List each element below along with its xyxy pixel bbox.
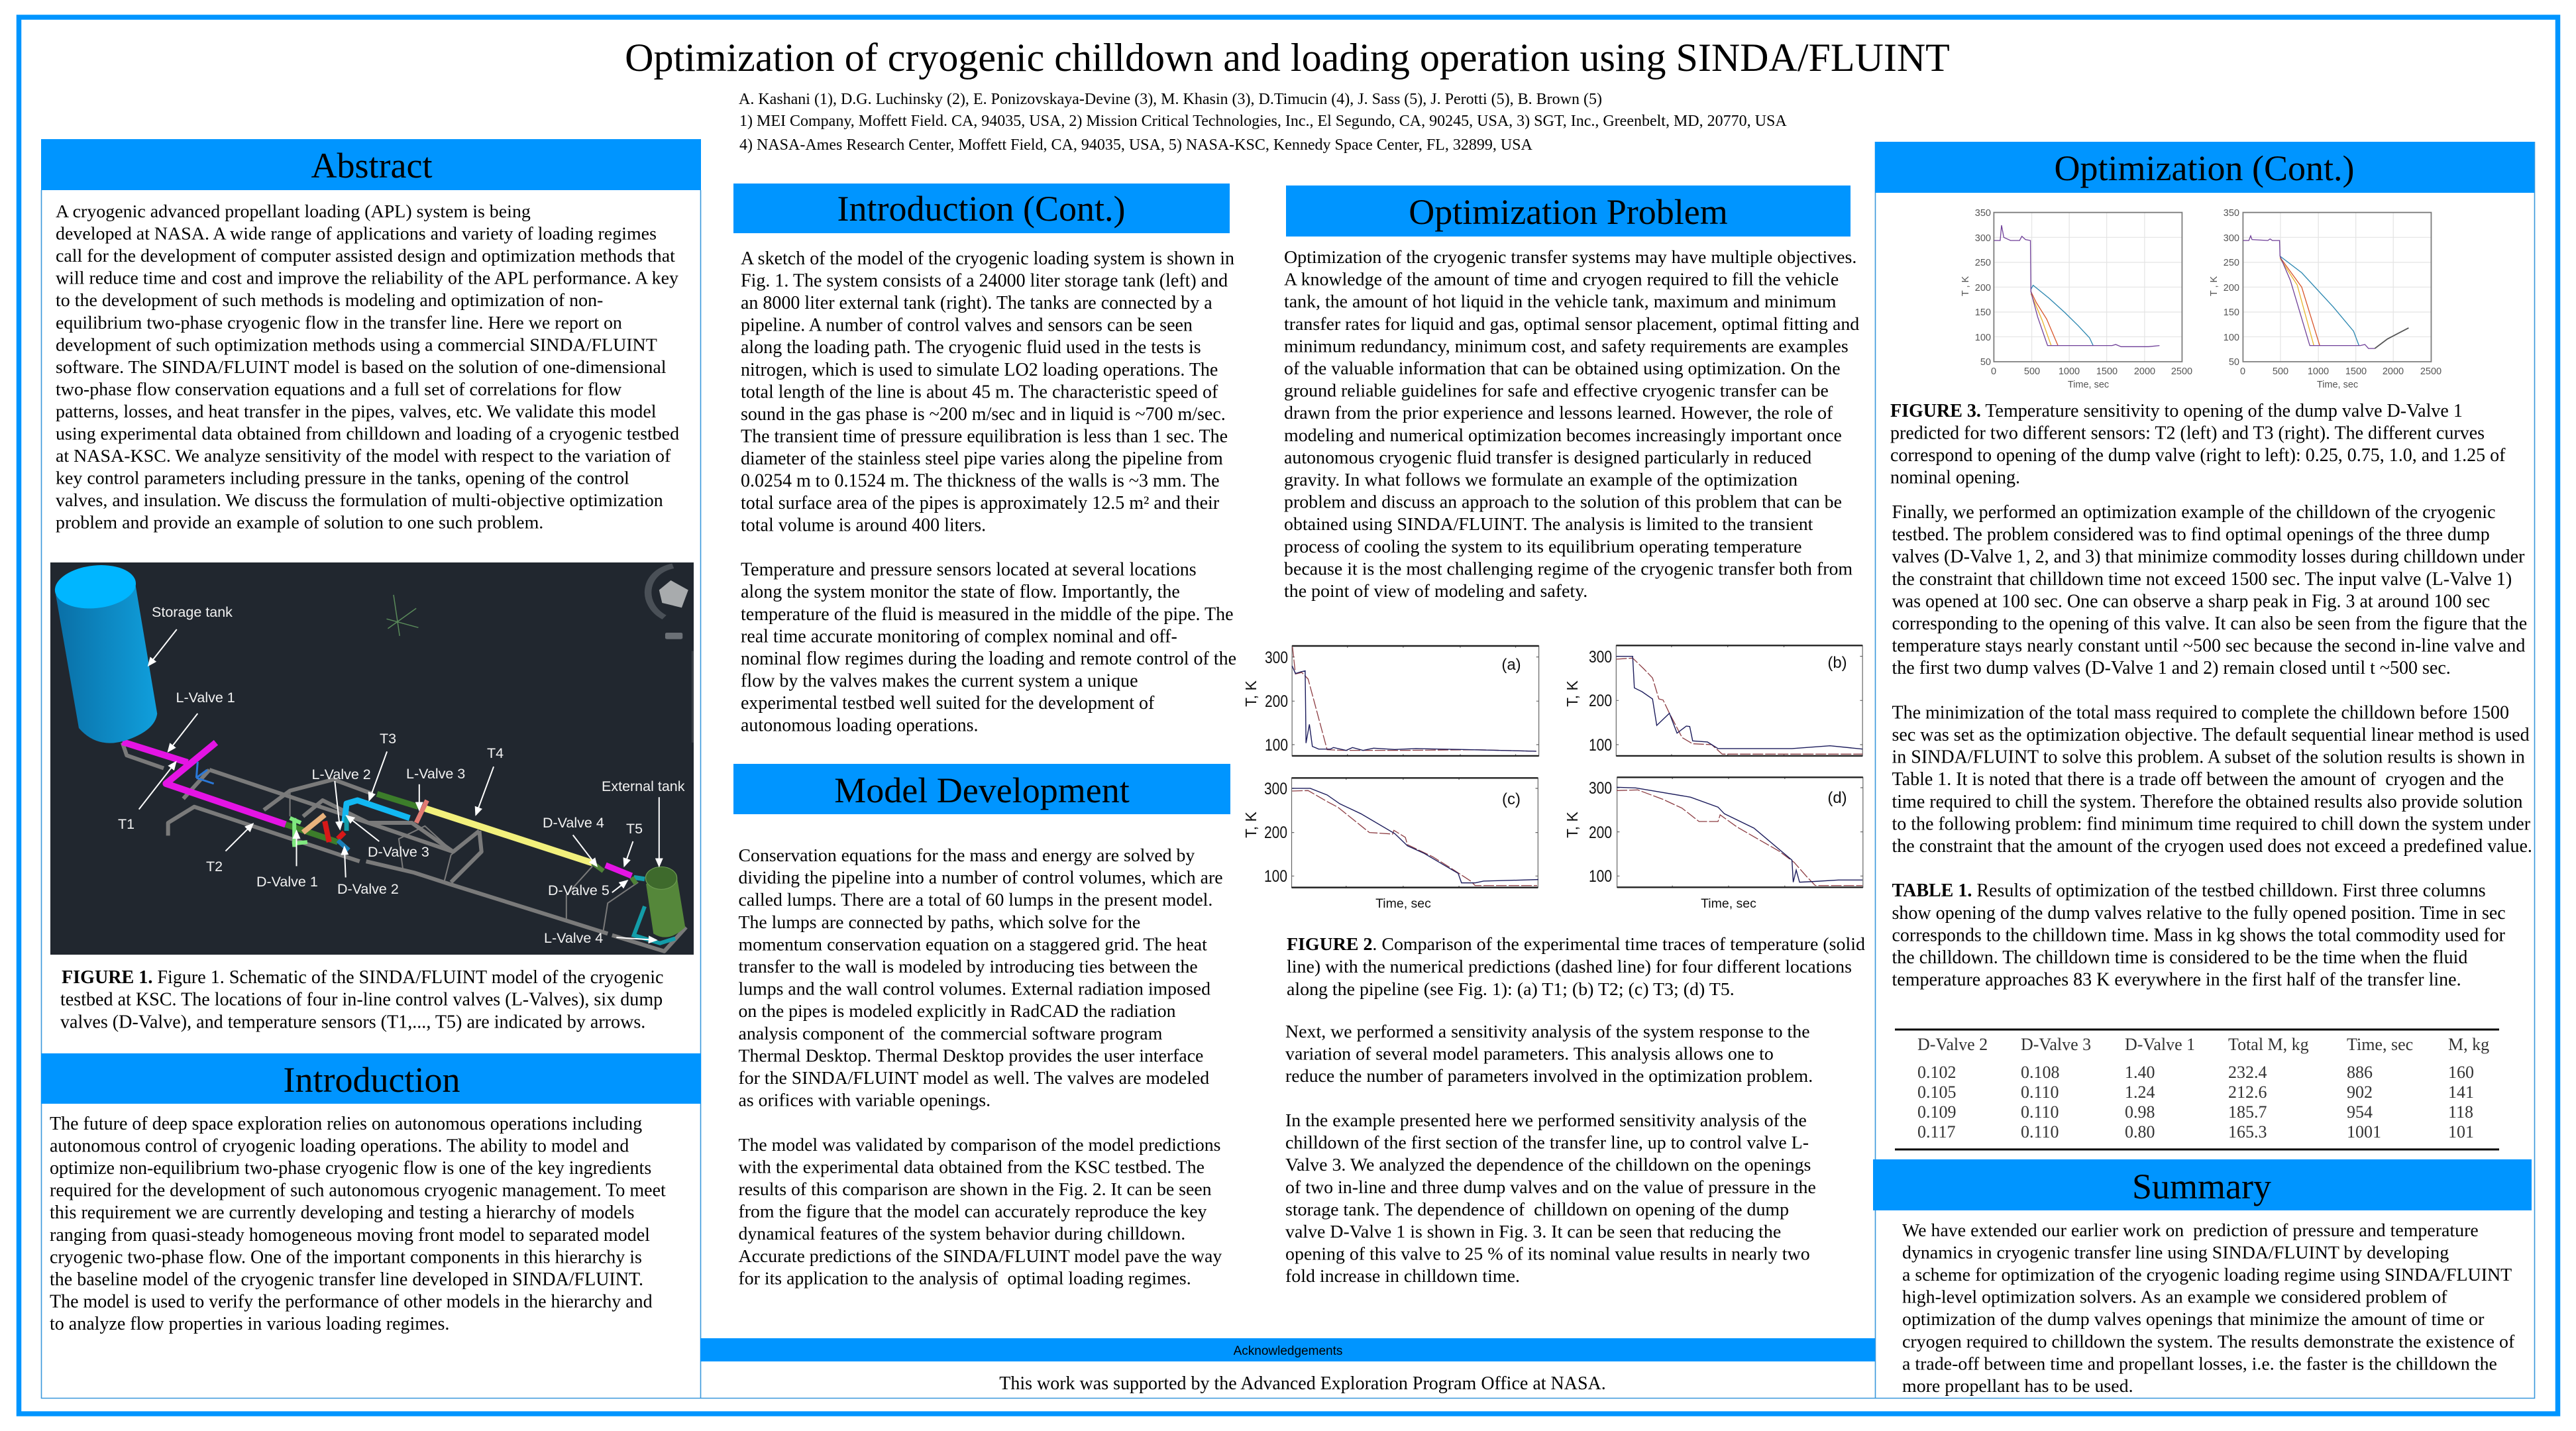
table 1: optimization results: D-Valve 3 [2021, 1035, 2091, 1054]
text: optimization results and table caption: temperature stays nearly constant until ~500 sec because the second in-line valve and [1892, 636, 2525, 657]
text: summary: optimization of the dump valves openings that minimize the amount of time or [1902, 1309, 2485, 1330]
text: optimization problem: problem and discuss an approach to the solution of this problem that can be [1284, 492, 1842, 513]
figure 1 labels: D-Valve 4 [543, 815, 604, 831]
plot axis labels: 250 [2224, 258, 2239, 268]
plot axis labels: 0 [1991, 366, 1996, 377]
text: introduction: ranging from quasi-steady homogeneous moving front model to separated model [50, 1225, 650, 1246]
plot axis labels: 300 [1975, 233, 1991, 244]
text: optimization results and table caption: corresponding to the opening of this valve. It can also be seen from the figure that the [1892, 613, 2527, 634]
panel: abstract [41, 139, 701, 533]
text: optimization problem: tank, the amount of hot liquid in the vehicle tank, maximum and minimum [1284, 292, 1837, 312]
plot axis labels: Time, sec [1375, 896, 1431, 911]
panel: optimization continued [1875, 142, 2534, 1150]
table 1: optimization results: 0.110 [2021, 1122, 2059, 1141]
text: introduction cont: 0.0254 m to 0.1524 m. The thickness of the walls is ~3 mm. The [741, 470, 1220, 492]
text: introduction cont: along the loading path. The cryogenic fluid used in the tests is [741, 337, 1201, 358]
plot axis labels: 300 [1264, 780, 1287, 798]
text: optimization problem: because it is the most challenging regime of the cryogenic transfer both from [1284, 558, 1852, 579]
text: model development: from the figure that the model can accurately reproduce the key [738, 1202, 1207, 1222]
text: abstract: equilibrium two-phase cryogenic flow in the transfer line. Here we report on [56, 313, 622, 333]
text: optimization results and table caption: time required to chill the system. Therefore the obtained results also provide solution [1892, 792, 2523, 812]
text: optimization results and table caption: to the following problem: find minimum time required to chill down the system under [1892, 814, 2531, 834]
heading: optimization problem [1286, 186, 1851, 237]
text: introduction cont: total surface area of the pipes is approximately 12.5 m² and their [741, 493, 1220, 513]
text: optimization problem: modeling and numerical optimization becomes increasingly important once [1284, 425, 1842, 446]
heading: summary [1873, 1159, 2532, 1210]
panel: summary [1873, 1159, 2532, 1397]
plot axis labels: 200 [1975, 283, 1991, 293]
heading: introduction cont: Introduction (Cont.) [837, 189, 1125, 229]
plot axis labels: T , K [2209, 276, 2220, 296]
heading: summary: Summary [2132, 1167, 2271, 1206]
pipeline drawing [123, 595, 692, 951]
plot axis labels: Time, sec [1701, 896, 1756, 911]
text: optimization problem: ground reliable guidelines for safe and effective cryogenic transfer can be [1284, 381, 1829, 401]
plot axis labels: 150 [1975, 307, 1991, 318]
plot axis labels [1960, 208, 2442, 390]
figure 1 labels: T2 [206, 859, 223, 874]
figure 1 caption: FIGURE 1. Figure 1. Schematic of the SINDA/FLUINT model of the cryogenic [62, 967, 663, 988]
table 1: optimization results: 0.105 [1917, 1083, 1956, 1102]
plot axis labels: Time, sec [2068, 380, 2109, 390]
plot axis labels: 100 [1589, 736, 1612, 755]
plot axis labels: 2000 [2134, 366, 2155, 377]
figure 2: temperature traces [1242, 645, 1863, 911]
figure 3: temperature sensitivity plots [1960, 208, 2442, 390]
icon: storage tank [50, 560, 157, 743]
figure 1 labels: L-Valve 1 [176, 690, 235, 706]
figure 1 labels: L-Valve 3 [406, 766, 465, 782]
figure 2 caption and following text: storage tank. The dependence of chilldown on opening of the dump [1285, 1199, 1789, 1220]
plot axis labels: T, K [1564, 812, 1581, 838]
text: introduction: optimize non-equilibrium two-phase cryogenic flow is one of the key ingredients [50, 1158, 651, 1179]
figure 1 labels: T1 [118, 816, 134, 832]
text: abstract: call for the development of computer assisted design and optimization methods that [56, 246, 675, 266]
heading: model development [733, 764, 1230, 814]
text: optimization results and table caption: the first two dump valves (D-Valve 1 and 2) remain closed until t ~500 sec. [1892, 658, 2451, 678]
plot axis labels: 200 [1264, 823, 1287, 842]
heading: abstract [41, 139, 701, 190]
title: Optimization of cryogenic chilldown and loading operation using SINDA/FLUINT [625, 36, 1950, 80]
text: summary: dynamics in cryogenic transfer line using SINDA/FLUINT by developing [1902, 1243, 2449, 1263]
text: introduction cont: nitrogen, which is used to simulate LO2 loading operations. The [741, 360, 1218, 380]
text: abstract: two-phase flow conservation equations and a full set of correlations for flow [56, 379, 622, 399]
figure 1 labels: D-Valve 2 [337, 881, 399, 897]
figure 2 caption and following text: Next, we performed a sensitivity analysis of the system response to the [1285, 1022, 1810, 1042]
figure 1 labels: T4 [487, 745, 504, 761]
plot axis labels: 100 [1975, 333, 1991, 343]
text: introduction cont: The transient time of pressure equilibration is less than 1 sec. The [741, 426, 1228, 447]
text: introduction cont: an 8000 liter external tank (right). The tanks are connected by a [741, 293, 1212, 313]
table 1: optimization results: 886 [2347, 1063, 2373, 1082]
figure 3 caption: predicted for two different sensors: T2 (left) and T3 (right). The different curves [1890, 423, 2485, 444]
text: summary: more propellant has to be used. [1902, 1376, 2133, 1397]
plot axis labels: 100 [2224, 333, 2239, 343]
table 1: optimization results: 0.98 [2125, 1102, 2155, 1122]
plot axis labels: T, K [1242, 812, 1260, 838]
plot axis labels: T , K [1960, 276, 1971, 296]
text: optimization results and table caption: The minimization of the total mass required to complete the chilldown before 1500 [1892, 702, 2509, 723]
text: summary: a trade-off between time and propellant losses, i.e. the faster is the chilldown the [1902, 1353, 2497, 1374]
figure 1: schematic of the testbed [50, 560, 694, 955]
text: optimization results and table caption: show opening of the dump valves relative to the fully opened position. Time in sec [1892, 903, 2506, 924]
text: introduction: autonomous control of cryogenic loading operations. The ability to model and [50, 1136, 629, 1157]
table 1: optimization results: 954 [2347, 1102, 2373, 1122]
authors and affiliations: A. Kashani (1), D.G. Luchinsky (2), E. Ponizovskaya-Devine (3), M. Khasin (3), D.Timucin (4), J. Sass (5), J. Perotti (5), B. Brown (5) [739, 91, 1602, 108]
table 1: optimization results: 0.110 [2021, 1102, 2059, 1122]
text: introduction: cryogenic two-phase flow. One of the important components in this hierarchy is [50, 1247, 642, 1267]
text: optimization results and table caption: sec was set as the optimization objective. The default sequential linear method is used [1892, 725, 2530, 745]
text: introduction cont: total length of the line is about 45 m. The characteristic speed of [741, 382, 1218, 402]
figure 1 labels [118, 604, 685, 946]
icon: external tank [645, 867, 685, 937]
table 1: optimization results: 141 [2448, 1083, 2474, 1102]
plot axis labels: 100 [1265, 736, 1288, 755]
table 1: optimization results: 1.40 [2125, 1063, 2155, 1082]
figure 2 caption and following text: opening of this valve to 25 % of its nominal value results in nearly two [1285, 1244, 1810, 1265]
plot axis labels: 2500 [2420, 366, 2442, 377]
text: model development: dynamical features of the system behavior during chilldown. [738, 1224, 1185, 1244]
text: introduction cont: temperature of the fluid is measured in the middle of the pipe. The [741, 604, 1234, 625]
text: introduction cont: nominal flow regimes during the loading and remote control of the [741, 649, 1236, 669]
table 1: optimization results: 1.24 [2125, 1083, 2155, 1102]
figure 3 caption: correspond to opening of the dump valve (right to left): 0.25, 0.75, 1.0, and 1.25 of [1890, 445, 2506, 466]
heading: optimization cont: Optimization (Cont.) [2055, 148, 2354, 188]
text: introduction cont: A sketch of the model of the cryogenic loading system is shown in [741, 248, 1234, 269]
table 1: optimization results: Total M, kg [2228, 1035, 2309, 1054]
text: optimization problem: the point of view of modeling and safety. [1284, 581, 1587, 602]
figure 2 caption and following text: FIGURE 2. Comparison of the experimental time traces of temperature (solid [1287, 934, 1865, 955]
text: model development: Thermal Desktop. Thermal Desktop provides the user interface [738, 1045, 1203, 1066]
text: model development: for its application to the analysis of optimal loading regimes. [738, 1268, 1191, 1289]
figure 1 labels: T5 [626, 821, 643, 837]
figure 1 labels: D-Valve 3 [368, 844, 429, 860]
text: abstract: using experimental data obtained from chilldown and loading of a cryogenic testbed [56, 424, 679, 444]
plot axis labels: T, K [1564, 680, 1581, 707]
text: model development: with the experimental data obtained from the KSC testbed. The [738, 1157, 1205, 1177]
text: optimization problem: process of cooling the system to its equilibrium operating temperature [1284, 537, 1802, 557]
plot axis labels: 350 [2224, 208, 2239, 219]
plot axis labels: 1500 [2096, 366, 2118, 377]
plot curves and frames [1291, 645, 1863, 888]
text: abstract: A cryogenic advanced propellant loading (APL) system is being [56, 201, 531, 222]
text: abstract: software. The SINDA/FLUINT model is based on the solution of one-dimensional [56, 357, 667, 378]
plot axis labels: 350 [1975, 208, 1991, 219]
text: introduction: The model is used to verify the performance of other models in the hierarchy and [50, 1291, 653, 1312]
table 1: optimization results: 902 [2347, 1083, 2373, 1102]
text: abstract: key control parameters including pressure in the tanks, opening of the control [56, 468, 629, 489]
text: model development: Accurate predictions of the SINDA/FLUINT model pave the way [738, 1246, 1222, 1267]
plot axis labels: 1500 [2345, 366, 2367, 377]
figure 2 caption and following text: Valve 3. We analyzed the dependence of the chilldown on the openings [1285, 1155, 1811, 1175]
text: introduction cont: Fig. 1. The system consists of a 24000 liter storage tank (left) and [741, 271, 1228, 292]
text: optimization problem: transfer rates for liquid and gas, optimal sensor placement, optimal fitting and [1284, 314, 1859, 335]
text: model development: as orifices with variable openings. [738, 1090, 991, 1111]
figure 2 caption and following text: In the example presented here we performed sensitivity analysis of the [1285, 1110, 1807, 1131]
text: abstract: valves, and insulation. We discuss the formulation of multi-objective optimization [56, 490, 663, 511]
plot axis labels: 200 [1265, 692, 1288, 711]
panel: model development [733, 764, 1230, 1289]
figure 1 labels: D-Valve 5 [548, 882, 610, 898]
table 1: optimization results: Time, sec [2347, 1035, 2413, 1054]
plot axis labels [1242, 648, 1847, 911]
table 1: optimization results: 165.3 [2228, 1122, 2267, 1141]
plot axis labels: 200 [2224, 283, 2239, 293]
text: model development: called lumps. There are a total of 60 lumps in the present model. [738, 890, 1212, 910]
text: model development: analysis component of the commercial software program [738, 1024, 1163, 1044]
text: introduction cont: total volume is around 400 liters. [741, 515, 986, 536]
plot axis labels: 300 [1589, 648, 1612, 666]
table 1: optimization results: 0.109 [1917, 1102, 1956, 1122]
text: optimization results and table caption: Results of optimization of the testbed chilldown. First three columns [1972, 880, 2486, 901]
text: model development: lumps and the wall control volumes. External radiation imposed [738, 979, 1210, 1000]
text: model development: momentum conservation equation on a staggered grid. The heat [738, 934, 1207, 955]
figure 1 labels: L-Valve 4 [544, 930, 603, 946]
text: optimization problem: autonomous cryogenic fluid transfer is designed particularly in reduced [1284, 447, 1811, 468]
plot axis labels: 300 [2224, 233, 2239, 244]
figure 1 labels: D-Valve 1 [256, 874, 318, 890]
plot axis labels: Time, sec [2317, 380, 2358, 390]
figure 2 caption and following text: along the pipeline (see Fig. 1): (a) T1; (b) T2; (c) T3; (d) T5. [1287, 979, 1735, 1000]
table 1: optimization results: 212.6 [2228, 1083, 2267, 1102]
plot axis labels: 250 [1975, 258, 1991, 268]
text: summary: high-level optimization solvers. As an example we considered problem of [1902, 1287, 2447, 1308]
plot axis labels: 500 [2273, 366, 2288, 377]
heading: introduction: Introduction [284, 1060, 460, 1100]
text: abstract: to the development of such methods is modeling and optimization of non- [56, 290, 603, 311]
text: summary: a scheme for optimization of the cryogenic loading regime using SINDA/FLUINT [1902, 1265, 2512, 1285]
text: introduction cont: flow by the valves makes the current system a unique [741, 670, 1138, 691]
heading: introduction cont [733, 184, 1230, 233]
figure 2 caption and following text: variation of several model parameters. This analysis allows one to [1285, 1044, 1774, 1065]
figure 2 caption and following text: line) with the numerical predictions (dashed line) for four different locations [1287, 957, 1852, 977]
figure 2 caption and following text: valve D-Valve 1 is shown in Fig. 3. It can be seen that reducing the [1285, 1222, 1781, 1242]
figure 1 caption: valves (D-Valve), and temperature sensors (T1,..., T5) are indicated by arrows. [60, 1012, 645, 1032]
text: abstract: development of such optimization methods using a commercial SINDA/FLUINT [56, 335, 657, 355]
figure 2 caption and following text: fold increase in chilldown time. [1285, 1266, 1520, 1287]
text: optimization results and table caption: the constraint that chilldown time not exceed 1500 sec. The input valve (L-Valve 1) [1892, 569, 2512, 590]
text: introduction: required for the development of such autonomous cryogenic management. To meet [50, 1181, 666, 1201]
plot axis labels: 200 [1589, 823, 1612, 842]
plot axis labels: 2500 [2171, 366, 2192, 377]
heading: optimization problem: Optimization Problem [1409, 192, 1728, 232]
table 1: optimization results: 232.4 [2228, 1063, 2267, 1082]
text: optimization problem: drawn from the prior experience and lessons learned. However, the role of [1284, 403, 1833, 423]
figure 1 labels: L-Valve 2 [311, 767, 371, 782]
figure 1 labels: Storage tank [152, 604, 233, 620]
plot axis labels: 100 [1589, 867, 1612, 886]
table 1: optimization results: 101 [2448, 1122, 2474, 1141]
heading: abstract: Abstract [311, 146, 432, 186]
figure 3 caption: nominal opening. [1890, 468, 2020, 488]
text: model development: results of this comparison are shown in the Fig. 2. It can be seen [738, 1179, 1212, 1200]
table 1: optimization results: D-Valve 2 [1917, 1035, 1988, 1054]
text: optimization problem: A knowledge of the amount of time and cryogen required to fill the vehicle [1284, 270, 1839, 290]
plot axis labels: 1000 [2059, 366, 2080, 377]
heading: acknowledgements [700, 1338, 1875, 1361]
heading: acknowledgements: Acknowledgements [1234, 1344, 1342, 1358]
text: introduction cont: pipeline. A number of control valves and sensors can be seen [741, 315, 1193, 336]
table 1: optimization results: 0.108 [2021, 1063, 2059, 1082]
panel: optimization problem [1284, 186, 1859, 602]
text: optimization results and table caption: the chilldown. The chilldown time is considered to be the time when the fluid [1892, 947, 2467, 968]
text: optimization results and table caption: Finally, we performed an optimization example of the chilldown of the cryogenic [1892, 502, 2496, 523]
table 1: optimization results: 0.80 [2125, 1122, 2155, 1141]
text: summary: cryogen required to chilldown the system. The results demonstrate the existence of [1902, 1332, 2515, 1352]
table 1: optimization results: M, kg [2448, 1035, 2489, 1054]
text: abstract: patterns, losses, and heat transfer in the pipes, valves, etc. We validate this model [56, 401, 657, 422]
figure 2 caption and following text: reduce the number of parameters involved in the optimization problem. [1285, 1066, 1813, 1086]
figure 1 labels: External tank [602, 778, 685, 794]
text: model development: for the SINDA/FLUINT model as well. The valves are modeled [738, 1068, 1209, 1088]
text: optimization problem: minimum redundancy, minimum cost, and safety requirements are examples [1284, 336, 1849, 356]
icon: view cube [648, 566, 688, 639]
text: introduction cont: autonomous loading operations. [741, 716, 979, 736]
plot axis labels: 1000 [2308, 366, 2329, 377]
table 1: optimization results: 0.117 [1917, 1122, 1956, 1141]
text: summary: We have extended our earlier work on prediction of pressure and temperature [1902, 1220, 2479, 1241]
plot curves and frames [1994, 213, 2431, 362]
table 1: optimization results: 118 [2448, 1102, 2473, 1122]
table 1: optimization results: 185.7 [2228, 1102, 2267, 1122]
table 1: optimization results: 160 [2448, 1063, 2474, 1082]
text: acknowledgements: This work was supported by the Advanced Exploration Program Office at NASA. [999, 1373, 1606, 1394]
heading: introduction [41, 1053, 701, 1104]
panel: introduction [41, 1053, 701, 1334]
text: introduction: the baseline model of the cryogenic transfer line developed in SINDA/FLUINT. [50, 1269, 643, 1290]
text: introduction: to analyze flow properties in various loading regimes. [50, 1314, 449, 1334]
text: introduction: this requirement we are currently developing and testing a hierarchy of models [50, 1202, 634, 1223]
plot axis labels: 200 [1589, 692, 1612, 710]
table 1: optimization results [1895, 1028, 2499, 1150]
text: introduction cont: Temperature and pressure sensors located at several locations [741, 560, 1197, 580]
text: introduction cont: diameter of the stainless steel pipe varies along the pipeline from [741, 449, 1223, 469]
plot axis labels: 2000 [2383, 366, 2404, 377]
panel: acknowledgements [700, 1338, 1875, 1394]
table 1: optimization results: 1001 [2347, 1122, 2381, 1141]
heading: optimization cont [1875, 142, 2534, 193]
table 1: optimization results: 0.110 [2021, 1083, 2059, 1102]
plot axis labels: 100 [1264, 867, 1287, 886]
text: optimization results and table caption: Table 1. It is noted that there is a trade off between the amount of cryogen and the [1892, 769, 2504, 790]
text: optimization results and table caption: was opened at 100 sec. One can observe a sharp peak in Fig. 3 at around 100 sec [1892, 591, 2490, 611]
text: introduction cont: sound in the gas phase is ~200 m/sec and in liquid is ~700 m/sec. [741, 404, 1226, 425]
text: abstract: at NASA-KSC. We analyze sensitivity of the model with respect to the variation of [56, 446, 671, 466]
arrows [139, 629, 659, 940]
text: introduction cont: along the system monitor the state of flow. Importantly, the [741, 582, 1180, 602]
figure 1 labels: T3 [380, 731, 396, 747]
plot axis labels: 300 [1265, 649, 1288, 667]
text: optimization results and table caption: testbed. The problem considered was to find optimal openings of the three dump [1892, 525, 2490, 545]
text: optimization problem: of the valuable information that can be obtained using optimization. On the [1284, 358, 1841, 379]
text: model development: The model was validated by comparison of the model predictions [738, 1135, 1220, 1155]
plot axis labels: (d) [1827, 789, 1847, 807]
plot axis labels: 150 [2224, 307, 2239, 318]
text: introduction cont: experimental testbed well suited for the development of [741, 693, 1155, 714]
text: optimization results and table caption: corresponds to the chilldown time. Mass in kg shows the total commodity used for [1892, 925, 2506, 945]
table 1: optimization results: D-Valve 1 [2125, 1035, 2195, 1054]
text: abstract: problem and provide an example of solution to one such problem. [56, 513, 543, 533]
text: optimization results and table caption: valves (D-Valve 1, 2, and 3) that minimize commodity losses during chilldown under [1892, 547, 2525, 567]
figure 3 caption: FIGURE 3. Temperature sensitivity to opening of the dump valve D-Valve 1 [1890, 401, 2463, 421]
text: abstract: developed at NASA. A wide range of applications and variety of loading regimes [56, 224, 657, 244]
text: introduction: The future of deep space exploration relies on autonomous operations including [50, 1114, 642, 1134]
plot axis labels: (a) [1501, 656, 1521, 674]
figure 2 caption and following text: chilldown of the first section of the transfer line, up to control valve L- [1285, 1133, 1809, 1153]
plot axis labels: 0 [2240, 366, 2245, 377]
text: model development: transfer to the wall is modeled by introducing ties between the [738, 957, 1198, 977]
authors and affiliations: 4) NASA-Ames Research Center, Moffett Field, CA, 94035, USA, 5) NASA-KSC, Kennedy Space Center, FL, 32899, USA [739, 136, 1533, 154]
plot axis labels: (b) [1827, 654, 1847, 672]
plot axis labels: 500 [2024, 366, 2040, 377]
text: optimization results and table caption: in SINDA/FLUINT to solve this problem. A subset of the solution results is shown in [1892, 747, 2525, 768]
authors and affiliations: 1) MEI Company, Moffett Field. CA, 94035, USA, 2) Mission Critical Technologies, Inc., El Segundo, CA, 90245, USA, 3) SGT, Inc., Greenbelt, MD, 20770, USA [739, 113, 1787, 130]
plot axis labels: 300 [1589, 779, 1612, 798]
plot axis labels: 50 [1980, 357, 1991, 368]
text: optimization problem: obtained using SINDA/FLUINT. The analysis is limited to the transient [1284, 514, 1813, 535]
panel: introduction continued [733, 184, 1236, 736]
text: optimization problem: gravity. In what follows we formulate an example of the optimization [1284, 470, 1798, 490]
plot axis labels: (c) [1502, 790, 1521, 808]
text: model development: dividing the pipeline into a number of control volumes, which are [738, 868, 1223, 888]
text: optimization results and table caption: the constraint that the amount of the cryogen used does not exceed a predefined value. [1892, 836, 2532, 857]
text: optimization results and table caption: TABLE 1. [1892, 880, 1972, 901]
text: optimization results and table caption: temperature approaches 83 K everywhere in the first half of the transfer line. [1892, 970, 2461, 990]
text: model development: Conservation equations for the mass and energy are solved by [738, 845, 1195, 866]
text: optimization problem: Optimization of the cryogenic transfer systems may have multiple objectives. [1284, 247, 1856, 268]
table 1: optimization results: 0.102 [1917, 1063, 1956, 1082]
plot axis labels: T, K [1242, 680, 1260, 707]
text: abstract: will reduce time and cost and improve the reliability of the APL performance. A key [56, 268, 678, 289]
text: model development: The lumps are connected by paths, which solve for the [738, 912, 1140, 933]
text: introduction cont: real time accurate monitoring of complex nominal and off- [741, 626, 1177, 647]
figure 2 caption and following text: of two in-line and three dump valves and on the value of pressure in the [1285, 1177, 1816, 1198]
figure 1 caption: testbed at KSC. The locations of four in-line control valves (L-Valves), six dump [60, 990, 663, 1010]
text: model development: on the pipes is modeled explicitly in RadCAD the radiation [738, 1001, 1176, 1022]
heading: model development: Model Development [834, 770, 1130, 810]
plot axis labels: 50 [2229, 357, 2239, 368]
